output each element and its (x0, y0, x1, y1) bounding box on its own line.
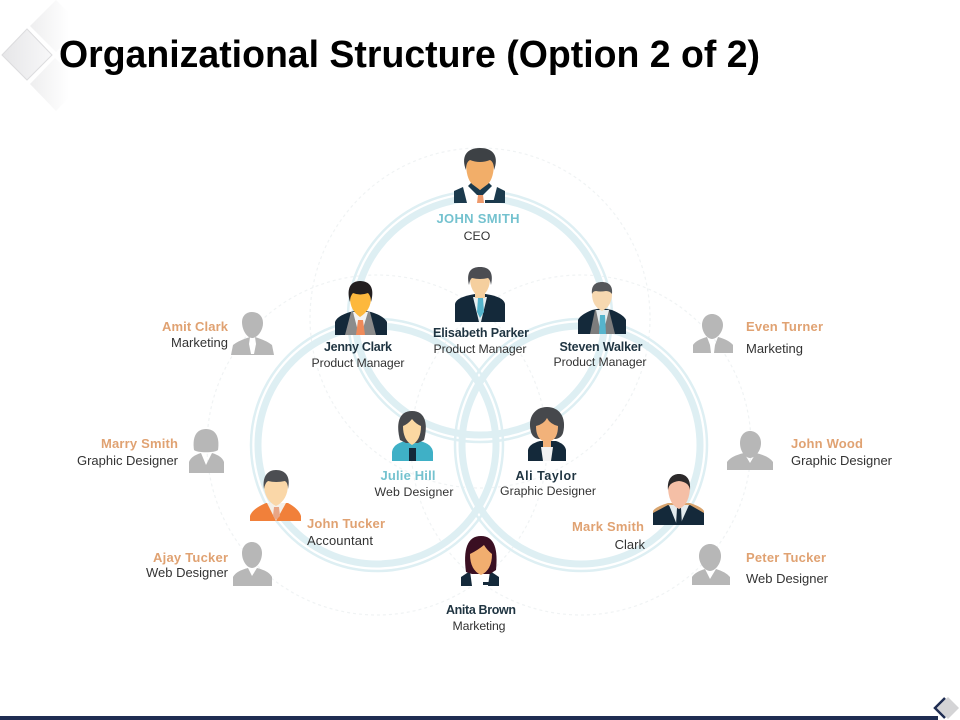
person: John Wood (727, 431, 893, 470)
icon: Ali Taylor avatar (528, 407, 566, 461)
role: Marketing (171, 335, 228, 350)
person: Mark Smith (572, 474, 704, 552)
role: Web Designer (746, 571, 829, 586)
person: John Smith, CEO (436, 148, 520, 243)
role: Product Manager (434, 342, 526, 356)
footer bar (0, 716, 938, 720)
corner decoration: diamonds (2, 0, 82, 111)
icon: Amit Clark silhouette (231, 312, 274, 355)
person: Anita Brown (446, 536, 516, 633)
role: CEO (464, 229, 490, 243)
role: Graphic Designer (77, 453, 179, 468)
person: Julie Hill (374, 411, 454, 499)
person: Elisabeth Parker (433, 267, 529, 356)
name: Jenny Clark (324, 340, 392, 354)
title: Organizational Structure (Option 2 of 2) (59, 34, 760, 76)
icon: John Wood silhouette (727, 431, 773, 470)
icon: Jenny Clark avatar (335, 281, 387, 335)
icon: Elisabeth Parker avatar (455, 267, 505, 322)
name: Mark Smith (572, 519, 644, 534)
person: John Tucker (250, 470, 385, 548)
role: Marketing (452, 619, 506, 633)
name: JOHN SMITH (436, 211, 520, 226)
diagram: three interlocking rings (251, 191, 707, 571)
name: Ali Taylor (516, 469, 577, 483)
icon: Julie Hill avatar (392, 411, 433, 461)
name: John Tucker (307, 516, 385, 531)
icon: Even Turner silhouette (693, 314, 733, 353)
icon: Steven Walker avatar (578, 282, 626, 334)
icon: Mark Smith avatar (653, 474, 704, 525)
icon: Marry Smith silhouette (189, 429, 224, 473)
role: Product Manager (312, 356, 404, 370)
name: Amit Clark (162, 319, 229, 334)
name: Peter Tucker (746, 550, 826, 565)
role: Accountant (307, 533, 373, 548)
person: Peter Tucker (692, 544, 829, 586)
name: Elisabeth Parker (433, 326, 529, 340)
name: Even Turner (746, 319, 823, 334)
role: Web Designer (146, 565, 229, 580)
name: Marry Smith (101, 436, 178, 451)
person: Jenny Clark (312, 281, 404, 370)
person: Even Turner (693, 314, 823, 356)
icon: Anita Brown avatar (461, 536, 499, 586)
name: Julie Hill (380, 468, 436, 483)
name: Ajay Tucker (153, 550, 228, 565)
icon: John Smith avatar (454, 148, 505, 203)
person: Marry Smith (77, 429, 224, 473)
name: Anita Brown (446, 603, 516, 617)
icon: Peter Tucker silhouette (692, 544, 730, 585)
name: John Wood (791, 436, 863, 451)
name: Steven Walker (560, 340, 643, 354)
person: Ali Taylor (500, 407, 596, 498)
faint dashed outer circles (207, 148, 751, 615)
role: Graphic Designer (791, 453, 893, 468)
role: Clark (615, 537, 645, 552)
person: Steven Walker (554, 282, 646, 369)
role: Product Manager (554, 355, 646, 369)
icon: Ajay Tucker silhouette (233, 542, 272, 586)
person: Amit Clark (162, 312, 274, 355)
icon: John Tucker avatar (250, 470, 301, 521)
person: Ajay Tucker (146, 542, 272, 586)
icon: corner chevron and diamond (935, 697, 959, 719)
role: Marketing (746, 341, 803, 356)
role: Graphic Designer (500, 484, 596, 498)
role: Web Designer (374, 485, 454, 499)
